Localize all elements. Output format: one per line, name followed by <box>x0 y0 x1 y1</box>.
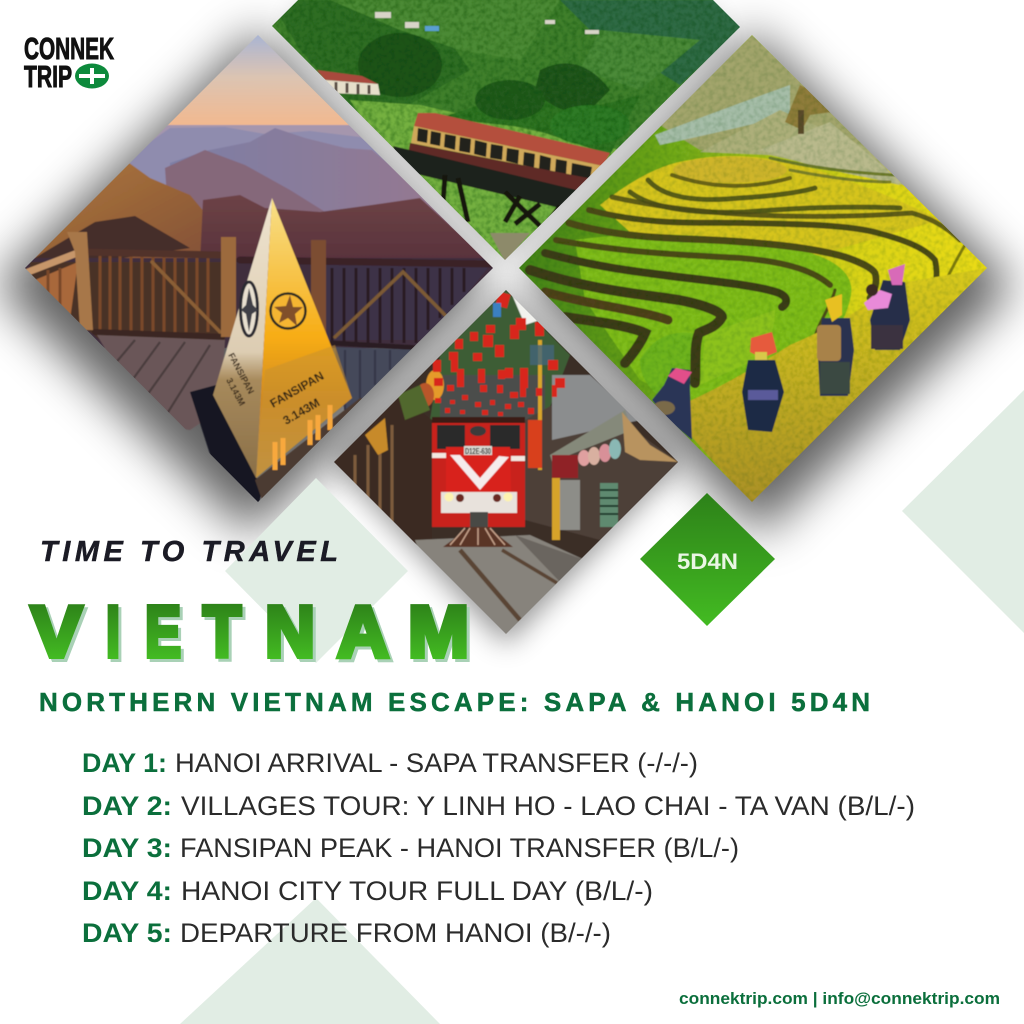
train front <box>432 417 525 547</box>
title shadow: M <box>411 596 472 676</box>
day 1: HANOI ARRIVAL - SAPA TRANSFER (-/-/-) <box>175 748 698 778</box>
title shadow: E <box>148 596 184 676</box>
title shadow: N <box>268 596 318 676</box>
logo <box>24 31 114 94</box>
obelisk base <box>190 385 262 510</box>
farmer 3 <box>817 294 854 396</box>
village houses <box>375 12 599 34</box>
title letters: V <box>31 592 82 672</box>
day 4: DAY 4: <box>82 876 172 906</box>
title letters: I <box>106 592 120 672</box>
decorative pale green diamond: centre <box>225 478 408 663</box>
day 1: DAY 1: <box>82 748 167 778</box>
obelisk: FANSIPAN <box>268 369 326 411</box>
title letters <box>31 592 469 672</box>
title shadow: A <box>340 596 392 676</box>
bright green paddies <box>576 234 852 400</box>
photo: Fansipan cable train and Sapa hills <box>260 0 750 270</box>
footer contact: connektrip.com | info@connektrip.com <box>679 990 1000 1008</box>
wooden deck <box>97 335 420 430</box>
logo wordmark line 1: CONNEK <box>24 31 114 66</box>
5D4N duration badge <box>640 493 775 626</box>
photo: Mu Cang Chai rice terraces <box>510 30 1000 510</box>
tree and sky <box>430 290 570 420</box>
day 5: DEPARTURE FROM HANOI (B/-/-) <box>180 918 611 948</box>
red flags and bunting <box>433 292 565 468</box>
day 4: HANOI CITY TOUR FULL DAY (B/L/-) <box>181 876 653 906</box>
station building <box>317 70 380 95</box>
fence balusters <box>48 256 464 343</box>
title letters: T <box>203 592 241 672</box>
fence posts <box>67 232 326 340</box>
cable train <box>408 113 610 194</box>
street shops right <box>525 340 678 540</box>
farmer 1 <box>652 368 692 440</box>
main title: Vietnam <box>31 592 472 676</box>
photo: Fansipan peak marker <box>20 30 500 510</box>
day 3: DAY 3: <box>82 833 172 863</box>
terrace mound <box>600 156 940 260</box>
title letters: A <box>337 592 389 672</box>
decorative pale green diamond: bottom <box>180 898 440 1024</box>
street shops left <box>353 370 445 522</box>
farmer 2 <box>742 332 784 432</box>
photo drop shadows <box>0 0 1015 645</box>
title letters: N <box>265 592 315 672</box>
gravel ground and rails <box>415 535 585 638</box>
subtitle: NORTHERN VIETNAM ESCAPE: SAPA & HANOI 5D4N <box>39 687 870 717</box>
golden rice foreground <box>668 268 987 505</box>
title shadow: I <box>109 596 123 676</box>
decorative pale green diamond: right <box>902 390 1024 633</box>
train front: D12E-630 <box>465 447 491 456</box>
title shadow: V <box>34 596 85 676</box>
title shadow: T <box>206 596 244 676</box>
tagline: TIME TO TRAVEL <box>40 536 338 568</box>
day 2: VILLAGES TOUR: Y LINH HO - LAO CHAI - TA VAN (B/L/-) <box>181 791 915 821</box>
logo plus pill icon <box>75 64 109 88</box>
fence diagonals and rails <box>28 252 490 348</box>
farmer 4 with child <box>864 264 910 350</box>
photo: Hanoi train street <box>330 285 685 640</box>
obelisk: 3.143M <box>224 376 247 407</box>
title letters: M <box>408 592 469 672</box>
day 2: DAY 2: <box>82 791 172 821</box>
obelisk: FANSIPAN <box>226 351 256 396</box>
itinerary list <box>82 748 915 948</box>
title letters: E <box>145 592 181 672</box>
terrace contour lines <box>530 158 965 383</box>
day 5: DAY 5: <box>82 918 172 948</box>
5D4N duration badge: 5D4N <box>677 549 738 574</box>
day 3: FANSIPAN PEAK - HANOI TRANSFER (B/L/-) <box>180 833 739 863</box>
obelisk <box>213 198 352 478</box>
title shadow <box>34 596 472 676</box>
logo wordmark line 2: TRIP <box>24 59 72 94</box>
obelisk: 3.143M <box>280 395 322 428</box>
railway bridge <box>393 146 585 226</box>
